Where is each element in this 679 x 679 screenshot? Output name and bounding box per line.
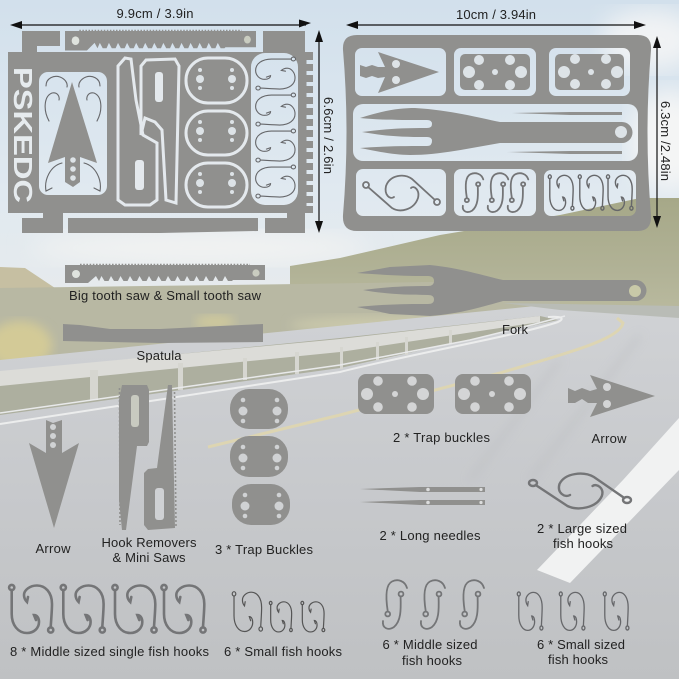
piece: long needles [360, 487, 485, 505]
label: six small sized fish hooks: fish hooks [548, 652, 608, 667]
fork on card [360, 108, 632, 155]
piece: six small fish hooks [232, 592, 325, 632]
dimension: left card height: 6.6cm / 2.6in [321, 97, 336, 174]
label: six small sized fish hooks: 6 * Small sized [537, 637, 625, 652]
label: large fish hooks: 2 * Large sized [537, 521, 627, 536]
label: arrow right: Arrow [592, 431, 627, 446]
hook removers outline on card [118, 58, 179, 205]
trap buckle A on card [460, 54, 530, 90]
arrowhead on card [48, 82, 97, 187]
small hooks around arrowhead [45, 76, 101, 191]
large hooks on card [363, 176, 440, 210]
arrowhead on card [360, 52, 439, 93]
piece: fork [357, 265, 646, 316]
label: six middle fish hooks: fish hooks [402, 653, 462, 668]
label: saw: Big tooth saw & Small tooth saw [69, 288, 262, 303]
middle hooks on card [463, 173, 528, 212]
spatula on card [68, 218, 258, 233]
label: fork: Fork [502, 322, 528, 337]
label: three trap buckles: 3 * Trap Buckles [215, 542, 314, 557]
label: six middle fish hooks [382, 637, 478, 668]
small hooks on card [548, 175, 633, 210]
card body [343, 35, 651, 231]
dimension: right card height: 6.3cm /2.48in [658, 101, 673, 181]
label: two trap buckles: 2 * Trap buckles [393, 430, 490, 445]
trap buckles on card [186, 58, 247, 207]
needles on card [507, 112, 622, 154]
label: large fish hooks: fish hooks [553, 536, 614, 551]
piece: saw [65, 265, 265, 283]
piece: hook removers and mini saws [119, 385, 176, 530]
piece: six small sized fish hooks [517, 592, 629, 630]
label: long needles: 2 * Long needles [380, 528, 481, 543]
dimension: left card width: 9.9cm / 3.9in [116, 6, 194, 21]
brand name stencil: PSKEDC [8, 67, 38, 203]
piece: arrow pointing down [29, 420, 79, 528]
piece: six middle fish hooks [383, 580, 484, 629]
label: hook removers: Hook Removers [102, 535, 197, 550]
piece: spatula [63, 324, 263, 343]
label: six small sized fish hooks [537, 637, 625, 667]
label: spatula: Spatula [136, 348, 182, 363]
label: hook removers: & Mini Saws [112, 550, 186, 565]
piece: eight middle single fish hooks [9, 585, 206, 633]
label: arrow: Arrow [36, 541, 71, 556]
dimension: right card width: 10cm / 3.94in [456, 7, 536, 22]
saw on card [65, 31, 256, 50]
label: hook removers [102, 535, 197, 565]
dimension: left card width [10, 6, 311, 29]
dimension: right card width [346, 7, 646, 29]
dimension: left card height [315, 30, 336, 233]
label: eight middle hooks: 8 * Middle sized single fish hooks [10, 644, 210, 659]
card body [8, 31, 313, 233]
trap buckle B on card [555, 54, 624, 90]
piece: arrow pointing right [568, 375, 655, 417]
piece: large fish hooks [529, 474, 631, 508]
panel: left multi-tool card [8, 31, 313, 233]
label: six middle fish hooks: 6 * Middle sized [382, 637, 478, 652]
panel: right multi-tool card [343, 35, 651, 231]
label: large fish hooks [537, 521, 627, 551]
label: six small fish hooks: 6 * Small fish hooks [224, 644, 342, 659]
piece: three trap buckles [230, 389, 290, 525]
dimension: right card height [653, 36, 673, 228]
piece: two trap buckles [358, 374, 531, 414]
fish hooks on card [256, 57, 296, 198]
